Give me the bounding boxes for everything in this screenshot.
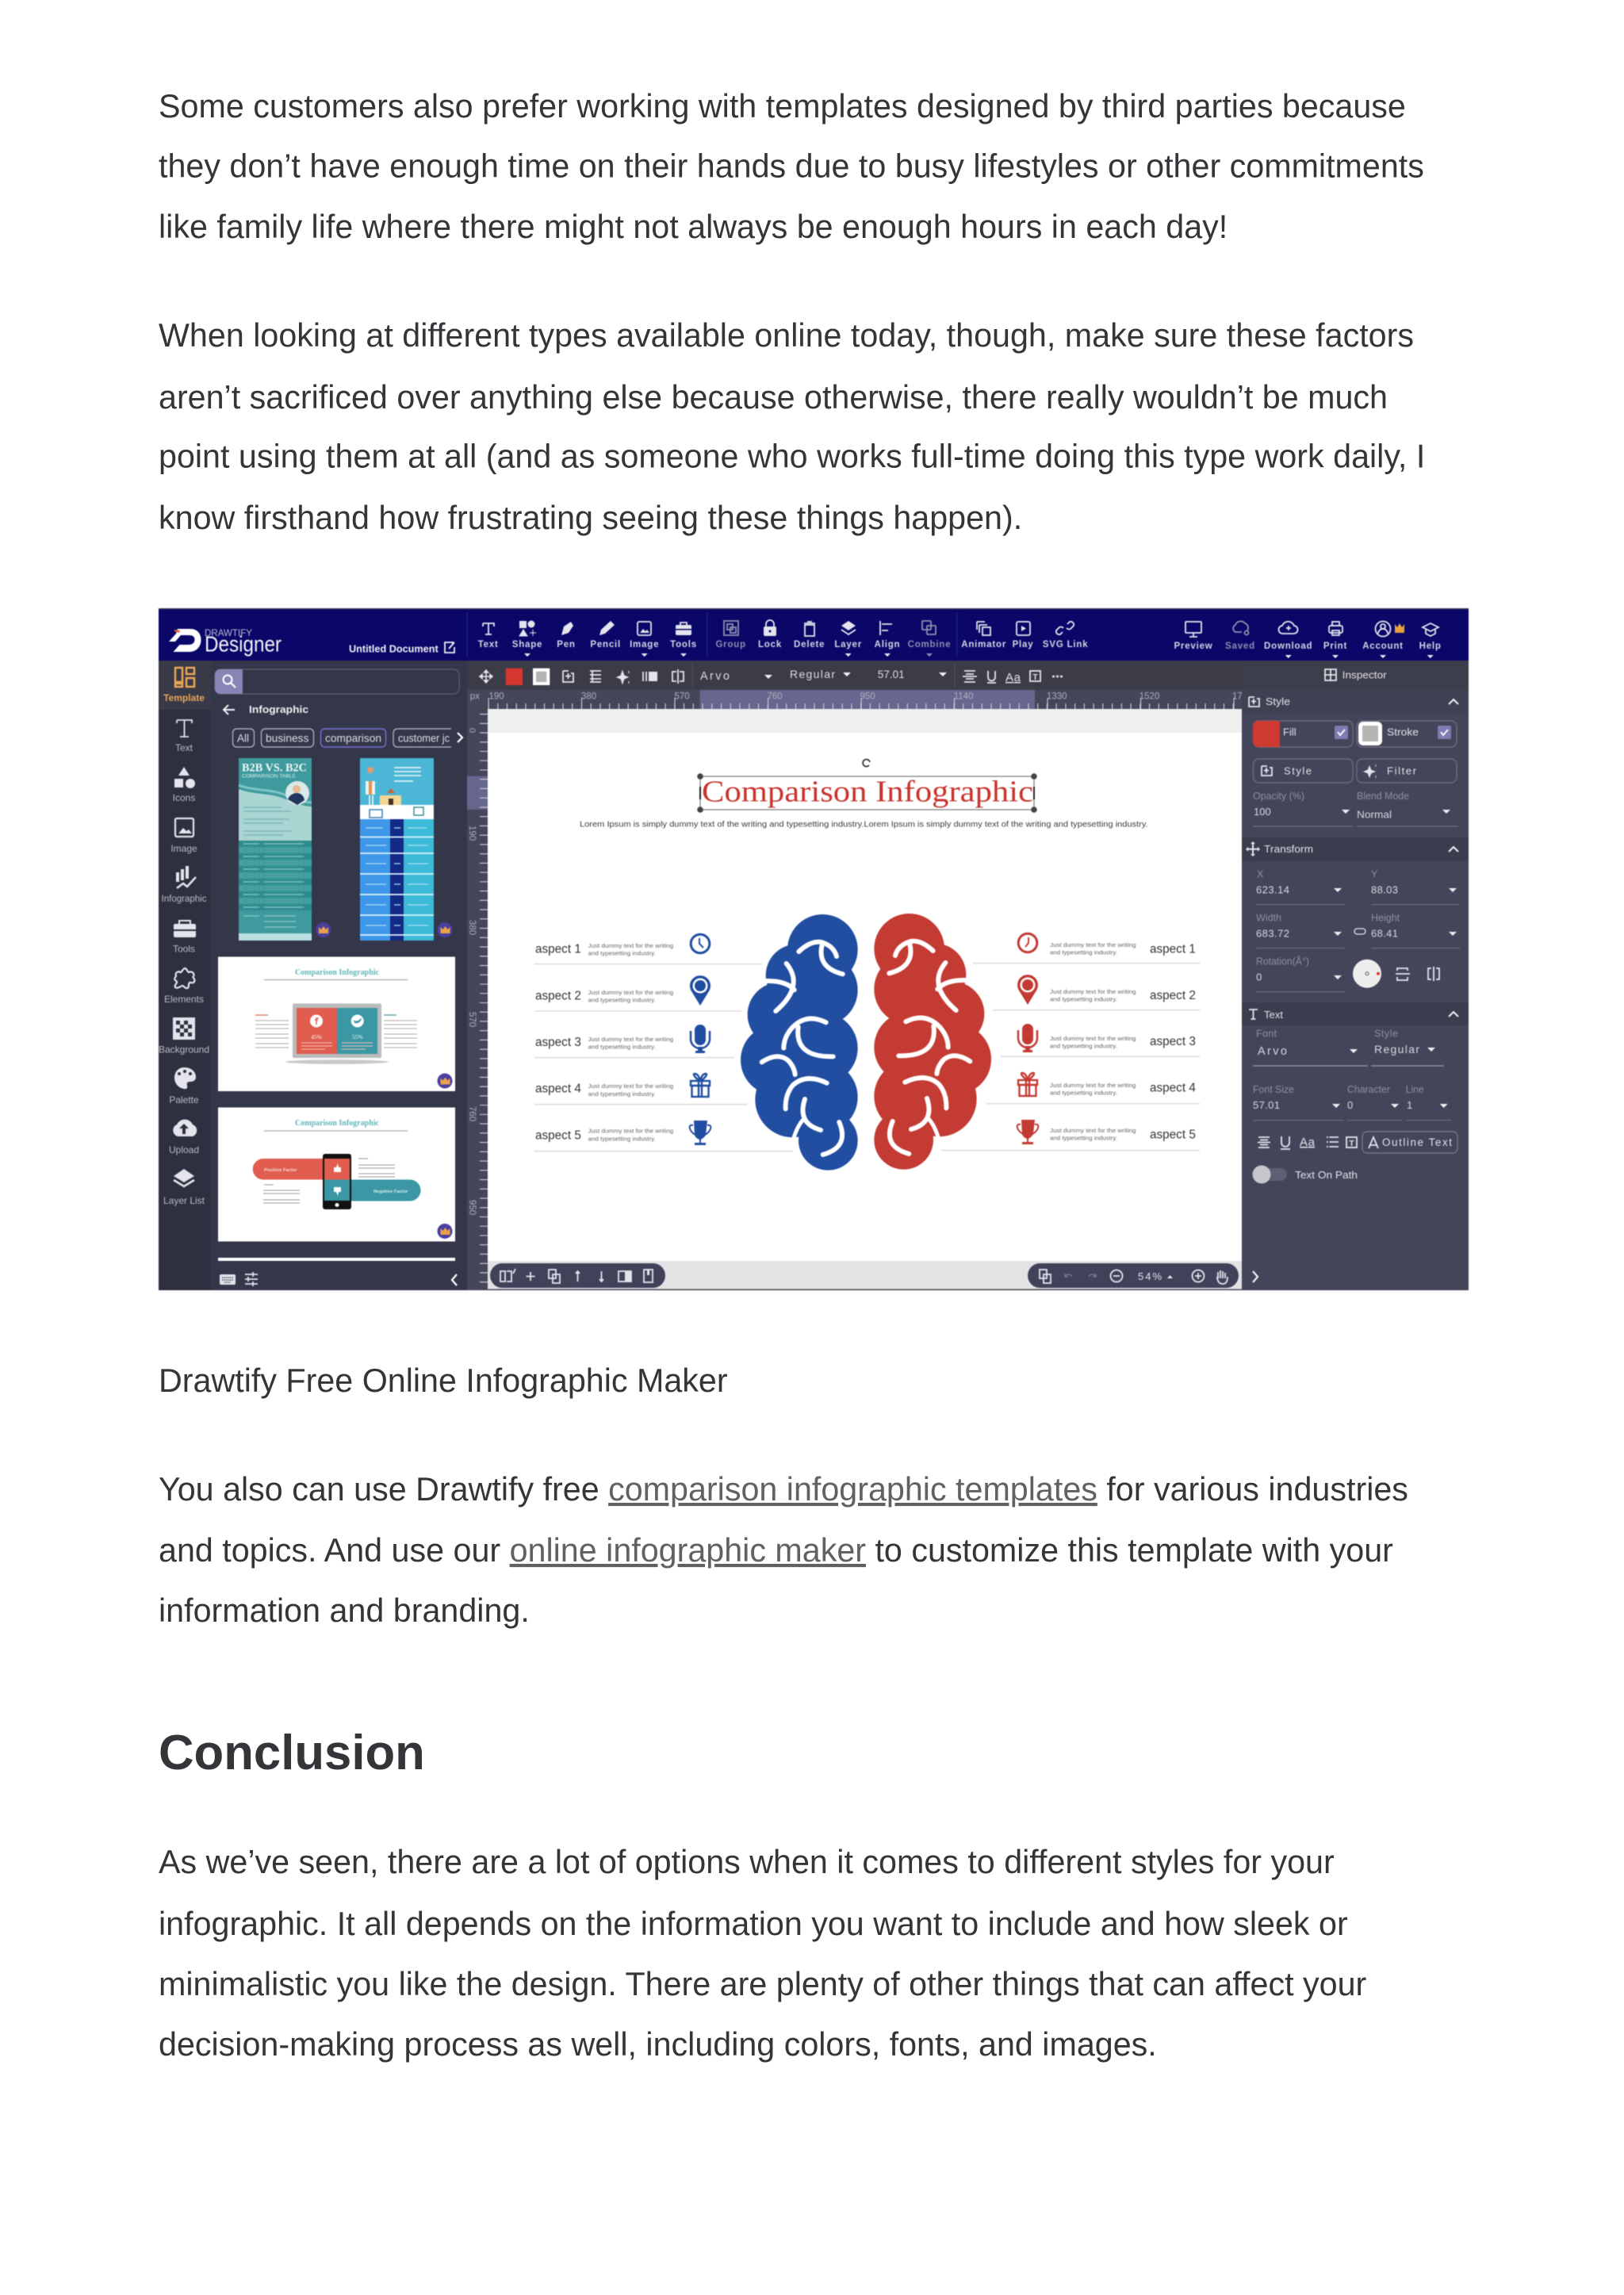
text block: paragraph about third party templates: like family life where there might not always be enough hours in each day! (159, 209, 1228, 245)
subtitle: Lorem Ipsum is simply dummy text of the writing and typesetting industry.Lorem Ipsum is simply dummy text of the writing and typesetting industry. (580, 821, 1148, 829)
opacity and blend mode: Blend Mode (1357, 791, 1409, 802)
panel: vertical ruler: 950 (467, 1200, 477, 1215)
text block: paragraph about factors to consider (159, 317, 1425, 536)
aspect 2 right: aspect 2 (1150, 989, 1196, 1002)
sidebar item: Template (163, 668, 205, 703)
transform width and height: Width (1256, 913, 1281, 924)
tool: Combine: Combine (908, 640, 951, 649)
tool: Print: Print (1323, 642, 1347, 651)
panel: vertical ruler: 760 (467, 1106, 477, 1121)
aspect 4 left: aspect 4 (535, 1082, 581, 1096)
text font settings (1253, 1029, 1444, 1066)
tool: Saved: Saved (1225, 642, 1255, 651)
text block: conclusion paragraph: decision-making process as well, including colors, fonts, and images. (159, 2026, 1157, 2063)
tool: Layer (834, 621, 862, 657)
aspect 5 right: and typesetting industry. (1050, 1134, 1117, 1142)
panel: format toolbar: Arvo (700, 670, 730, 683)
bottom left page controls (490, 1263, 665, 1288)
tool: Account (1362, 622, 1404, 658)
tool: Play: Play (1013, 640, 1033, 649)
stroke swatch (533, 669, 550, 685)
tool: SVG Link (1043, 622, 1088, 649)
template thumbnail: B2B vs B2C: B2B VS. B2C (242, 761, 307, 774)
panel: template browser (211, 661, 467, 1290)
template thumbnail: laptop comparison (218, 956, 455, 1091)
panel: format toolbar: Regular (790, 668, 835, 680)
text block: conclusion paragraph: minimalistic you like the design. There are plenty of other things that can affect your (159, 1966, 1367, 2002)
aspect 5 left: Just dummy text for the writing (588, 1128, 673, 1134)
text block: conclusion paragraph: As we’ve seen, there are a lot of options when it comes to different styles for your (159, 1844, 1335, 1880)
text font settings: Regular (1374, 1043, 1419, 1056)
aspect 1 right: and typesetting industry. (1050, 948, 1117, 956)
selected title: Comparison Infographic (697, 760, 1037, 813)
stroke control: Stroke (1387, 726, 1419, 738)
tool: Tools: Tools (670, 640, 697, 649)
transform rotation (1256, 956, 1439, 992)
text size settings: 57.01 (1253, 1099, 1280, 1111)
sidebar item: Infographic: Infographic (162, 895, 207, 904)
section header: Transform (1242, 837, 1469, 861)
icon: red clock (1018, 933, 1037, 952)
sidebar item: Template: Template (163, 692, 205, 703)
tool: Pencil: Pencil (590, 640, 621, 649)
aspect 5 left: aspect 5 (535, 1129, 581, 1142)
panel: horizontal ruler: 1140 (954, 692, 973, 701)
tool: Tools (670, 623, 697, 657)
tool: Pencil (590, 621, 621, 649)
aspect 2 left: and typesetting industry. (588, 996, 656, 1004)
logo: Drawtify Designer: Designer (205, 631, 282, 657)
filter button (1357, 759, 1457, 783)
panel: vertical ruler: 570 (467, 1012, 477, 1027)
aspect 4 left: Just dummy text for the writing (588, 1082, 673, 1090)
text block: conclusion paragraph: infographic. It all depends on the information you want to include and how sleek or (159, 1906, 1348, 1942)
template thumbnail: laptop comparison: 45% (311, 1033, 322, 1040)
outline text button (1362, 1132, 1457, 1153)
text size settings: Character (1347, 1084, 1390, 1095)
aspect 4 right: Just dummy text for the writing (1050, 1082, 1136, 1089)
tool: Lock (758, 620, 782, 649)
sidebar item: Elements: Elements (164, 994, 204, 1005)
panel: horizontal ruler: px (470, 692, 480, 701)
tool: Layer: Layer (834, 640, 862, 649)
panel: format toolbar (467, 661, 1242, 690)
aspect 2 left: aspect 2 (535, 990, 581, 1002)
sidebar item: Layer List (163, 1169, 205, 1206)
crown badge (438, 1074, 452, 1088)
right aspect list (941, 941, 1200, 1151)
text font settings: Arvo (1258, 1045, 1287, 1058)
filter button: Filter (1387, 764, 1417, 777)
category chips: business (266, 733, 309, 744)
panel: horizontal ruler: 570 (674, 692, 690, 701)
aspect 4 right: and typesetting industry. (1050, 1090, 1117, 1096)
icon: blue map pin (690, 975, 710, 1006)
sidebar item: Text (175, 720, 193, 753)
template thumbnail: phone comparison: Comparison Infographic (295, 1119, 379, 1128)
aspect 1 right: aspect 1 (1150, 942, 1196, 956)
sidebar item: Image (170, 818, 197, 854)
template thumbnail: phone comparison (218, 1107, 455, 1242)
icon: red microphone (1018, 1024, 1037, 1052)
tool: Delete: Delete (794, 640, 825, 649)
aspect 3 right (1050, 1035, 1196, 1050)
category chips: comparison (325, 733, 381, 744)
sidebar item: Icons (173, 767, 195, 803)
transform X and Y: Y (1371, 869, 1378, 880)
tool: Combine (908, 621, 951, 657)
aspect 3 left: and typesetting industry. (588, 1044, 656, 1050)
fill control: Fill (1283, 726, 1297, 738)
template thumbnail: phone comparison: Negative Factor (373, 1190, 408, 1194)
text size settings: Line (1406, 1084, 1424, 1095)
text on path toggle: Text On Path (1295, 1169, 1358, 1181)
opacity and blend mode: 100 (1254, 806, 1271, 818)
panel: vertical ruler: 0 (467, 728, 477, 733)
transform width and height: Height (1371, 913, 1400, 924)
aspect 5 right (1050, 1127, 1196, 1142)
panel: format toolbar: Aa (1005, 671, 1021, 684)
aspect 2 right: Just dummy text for the writing (1050, 988, 1136, 995)
sidebar item: Palette (169, 1067, 199, 1105)
tool: Pen (557, 622, 576, 649)
stroke control (1357, 721, 1457, 747)
panel: horizontal ruler: 190 (488, 692, 504, 701)
style button (1253, 759, 1353, 783)
aspect 1 left: Just dummy text for the writing (588, 942, 673, 949)
tool: Shape (512, 620, 542, 657)
tool: Lock: Lock (758, 640, 782, 649)
opacity and blend mode: Normal (1357, 809, 1392, 820)
brain: left blue hemisphere (741, 914, 858, 1170)
text format icons: Aa (1300, 1136, 1316, 1149)
fill swatch (506, 669, 523, 685)
transform width and height (1256, 913, 1460, 948)
aspect 3 right: Just dummy text for the writing (1050, 1035, 1136, 1042)
tool: Image (630, 622, 659, 657)
template thumbnail: phone comparison: Positive Factor (264, 1168, 297, 1173)
breadcrumb: Infographic: Infographic (249, 704, 308, 715)
tool: Text: Text (478, 640, 499, 649)
panel: horizontal ruler (467, 690, 1243, 709)
panel: top navigation bar (159, 608, 1469, 661)
search box (215, 669, 459, 694)
section header: Text (1242, 1002, 1469, 1025)
panel: vertical ruler: 190 (467, 826, 477, 841)
panel: left icon sidebar (159, 661, 211, 1290)
aspect 1 left (535, 942, 673, 956)
aspect 4 right (1050, 1082, 1196, 1096)
document title: Untitled Document (349, 644, 439, 655)
panel: horizontal ruler: 17 (1232, 692, 1243, 701)
template thumbnail: laptop comparison: Comparison Infographic (295, 968, 379, 977)
text block: paragraph about factors to consider: When looking at different types available online today, though, make sure these factors (159, 317, 1414, 354)
transform width and height: 68.41 (1371, 928, 1398, 940)
panel: Drawtify Designer editor screenshot (159, 608, 1469, 1290)
aspect 3 left: aspect 3 (535, 1036, 581, 1049)
collapse chevron (1253, 1271, 1258, 1282)
panel: format toolbar: 57.01 (878, 669, 905, 680)
text block: paragraph with links: You also can use Drawtify free comparison infographic templates for various industries (159, 1471, 1408, 1508)
category chips (233, 729, 462, 747)
text block: paragraph about factors to consider: point using them at all (and as someone who works full-time doing this type work daily, I (159, 438, 1425, 474)
left aspect list (534, 942, 793, 1151)
panel: inspector (1242, 661, 1469, 1290)
text block: paragraph with links (159, 1471, 1408, 1629)
tool: Help (1419, 623, 1442, 658)
panel: horizontal ruler: 1330 (1047, 692, 1067, 701)
text font settings: Style (1374, 1029, 1399, 1040)
inspector header (1242, 661, 1469, 688)
category chips: customer jc (398, 733, 450, 744)
panel: horizontal ruler: 1520 (1139, 692, 1159, 701)
sidebar item: Palette: Palette (169, 1094, 199, 1105)
tool: Image: Image (630, 640, 659, 649)
tool: Saved (1225, 621, 1255, 651)
aspect 2 left: Just dummy text for the writing (588, 989, 673, 996)
section header: Text: Text (1264, 1009, 1283, 1021)
bottom right zoom controls (1028, 1263, 1239, 1288)
style button: Style (1284, 764, 1312, 777)
icon: blue gift (691, 1074, 710, 1097)
aspect 5 right: aspect 5 (1150, 1128, 1196, 1142)
text size settings: Font Size (1253, 1084, 1294, 1095)
transform width and height: 683.72 (1256, 928, 1289, 940)
aspect 4 left: and typesetting industry. (588, 1090, 656, 1098)
text block: paragraph with links: and topics. And use our online infographic maker to customize this template with your (159, 1532, 1393, 1569)
transform X and Y: 88.03 (1371, 884, 1398, 896)
sidebar item: Layer List: Layer List (163, 1195, 205, 1206)
section header: Style (1242, 688, 1469, 712)
tool: Group (715, 621, 746, 649)
aspect 5 right: Just dummy text for the writing (1050, 1127, 1136, 1134)
icon: red trophy (1017, 1120, 1038, 1144)
text font settings: Font (1256, 1029, 1277, 1040)
icon: blue trophy (690, 1121, 710, 1145)
logo: Drawtify Designer: DRAWTIFY (205, 629, 252, 638)
bottom right zoom controls: 54% (1138, 1270, 1162, 1282)
brain: right red hemisphere (874, 914, 991, 1170)
aspect 5 left (535, 1128, 673, 1142)
sidebar item: Icons: Icons (173, 792, 195, 803)
text size settings: 0 (1347, 1099, 1353, 1111)
aspect 3 right: aspect 3 (1150, 1035, 1196, 1048)
text on path toggle (1253, 1166, 1358, 1183)
tool: SVG Link: SVG Link (1043, 640, 1088, 649)
tool: Play (1013, 622, 1033, 649)
inspector header: Inspector (1342, 669, 1387, 681)
tool: Group: Group (715, 640, 746, 649)
crown badge (438, 1224, 452, 1239)
aspect 3 right: and typesetting industry. (1050, 1042, 1117, 1050)
sidebar item: Upload: Upload (169, 1144, 199, 1155)
tool: Animator (961, 622, 1006, 649)
text block: paragraph about third party templates (159, 88, 1424, 245)
crown badge (316, 922, 331, 937)
tool: Print (1323, 622, 1347, 658)
tool: Delete (794, 622, 825, 649)
transform rotation: 0 (1256, 971, 1262, 983)
category chips: All (237, 733, 249, 744)
sidebar item: Image: Image (170, 843, 197, 854)
tool: Shape: Shape (512, 640, 542, 649)
tool: Help: Help (1419, 642, 1442, 651)
icon: blue microphone (691, 1025, 710, 1053)
aspect 3 left: Just dummy text for the writing (588, 1036, 673, 1043)
template thumbnail: B2B vs B2C (239, 758, 312, 941)
panel: canvas (488, 709, 1242, 1290)
caption: Drawtify Free Online Infographic Maker (159, 1362, 728, 1399)
panel: format toolbar: T (1032, 673, 1038, 682)
tool: Account: Account (1362, 642, 1404, 651)
heading: Conclusion: Conclusion (159, 1726, 425, 1780)
text format icons: T (1350, 1140, 1354, 1148)
aspect 1 right: Just dummy text for the writing (1050, 941, 1136, 948)
sidebar item: Infographic (162, 866, 207, 904)
tool: Text (478, 623, 499, 649)
tool: Preview (1174, 622, 1213, 651)
section header: Transform: Transform (1264, 843, 1313, 855)
panel: horizontal ruler: 950 (860, 692, 875, 701)
text block: conclusion paragraph (159, 1844, 1367, 2063)
tool: Animator: Animator (961, 640, 1006, 649)
sidebar item: Background (159, 1017, 209, 1055)
text block: paragraph about third party templates: they don’t have enough time on their hands due to busy lifestyles or other commitments (159, 148, 1424, 184)
sidebar item: Text: Text (175, 742, 193, 753)
aspect 2 left (535, 989, 673, 1004)
aspect 3 left (535, 1036, 673, 1050)
text block: paragraph with links: information and branding. (159, 1592, 530, 1629)
aspect 1 left: and typesetting industry. (588, 950, 656, 956)
sidebar item: Elements (164, 968, 204, 1005)
text size settings: 1 (1407, 1099, 1412, 1111)
transform X and Y: 623.14 (1256, 884, 1289, 896)
panel: vertical ruler: 380 (467, 920, 477, 935)
icon: blue clock (691, 934, 710, 953)
opacity and blend mode (1253, 791, 1458, 826)
tool: Download: Download (1264, 642, 1312, 651)
sidebar item: Tools: Tools (173, 944, 195, 955)
text block: paragraph about third party templates: Some customers also prefer working with templates designed by third parties because (159, 88, 1406, 125)
transform X and Y (1256, 869, 1459, 905)
aspect 4 left (535, 1082, 673, 1098)
aspect 1 right (1050, 941, 1196, 956)
icon: red map pin (1017, 975, 1038, 1005)
text block: paragraph about factors to consider: know firsthand how frustrating seeing these things happen). (159, 500, 1022, 536)
panel: horizontal ruler: 380 (581, 692, 596, 701)
breadcrumb: Infographic (224, 704, 308, 715)
transform X and Y: X (1257, 869, 1264, 880)
template thumbnail: B2B vs B2C: COMPARISON TABLE (242, 774, 296, 779)
opacity and blend mode: Opacity (%) (1253, 791, 1304, 802)
icon: red gift (1018, 1073, 1037, 1096)
aspect 1 left: aspect 1 (535, 943, 581, 956)
tool: Download (1264, 622, 1312, 658)
crown badge (438, 922, 452, 937)
template thumbnail: comparison table blue (360, 758, 434, 941)
panel: horizontal ruler: 760 (768, 692, 783, 701)
selected title: Comparison Infographic: Comparison Infographic (702, 776, 1033, 809)
tool: Align: Align (875, 640, 900, 649)
sidebar item: Tools (173, 921, 196, 955)
tool: Preview: Preview (1174, 642, 1213, 651)
aspect 2 right (1050, 988, 1196, 1002)
logo: Drawtify Designer (169, 629, 282, 657)
text size settings (1253, 1084, 1451, 1121)
transform rotation: Rotation(Å°) (1256, 956, 1309, 967)
tool: Align (875, 621, 900, 657)
outline text button: Outline Text (1382, 1136, 1452, 1148)
text format icons (1258, 1136, 1357, 1149)
aspect 2 right: and typesetting industry. (1050, 996, 1117, 1002)
section header: Style: Style (1266, 695, 1290, 707)
aspect 5 left: and typesetting industry. (588, 1136, 656, 1142)
panel: vertical ruler (467, 709, 488, 1290)
sidebar item: Background: Background (159, 1044, 209, 1055)
aspect 4 right: aspect 4 (1150, 1082, 1196, 1094)
fill control (1253, 721, 1353, 747)
template thumbnail: laptop comparison: 55% (352, 1033, 363, 1040)
tool: Pen: Pen (557, 640, 576, 649)
sidebar item: Upload (169, 1120, 199, 1155)
text block: paragraph about factors to consider: aren’t sacrificed over anything else because otherwise, there really wouldn’t be much (159, 379, 1388, 416)
panel footer icons (220, 1272, 457, 1286)
